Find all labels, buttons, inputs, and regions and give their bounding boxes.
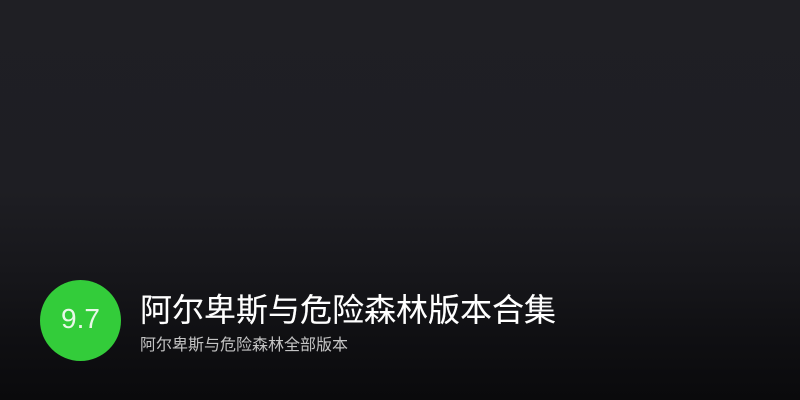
badge: score 9.7 (40, 280, 121, 361)
title: 阿尔卑斯与危险森林版本合集 (140, 292, 556, 328)
badge: score 9.7: 9.7 (61, 303, 100, 334)
subtitle: 阿尔卑斯与危险森林全部版本 (140, 337, 348, 354)
